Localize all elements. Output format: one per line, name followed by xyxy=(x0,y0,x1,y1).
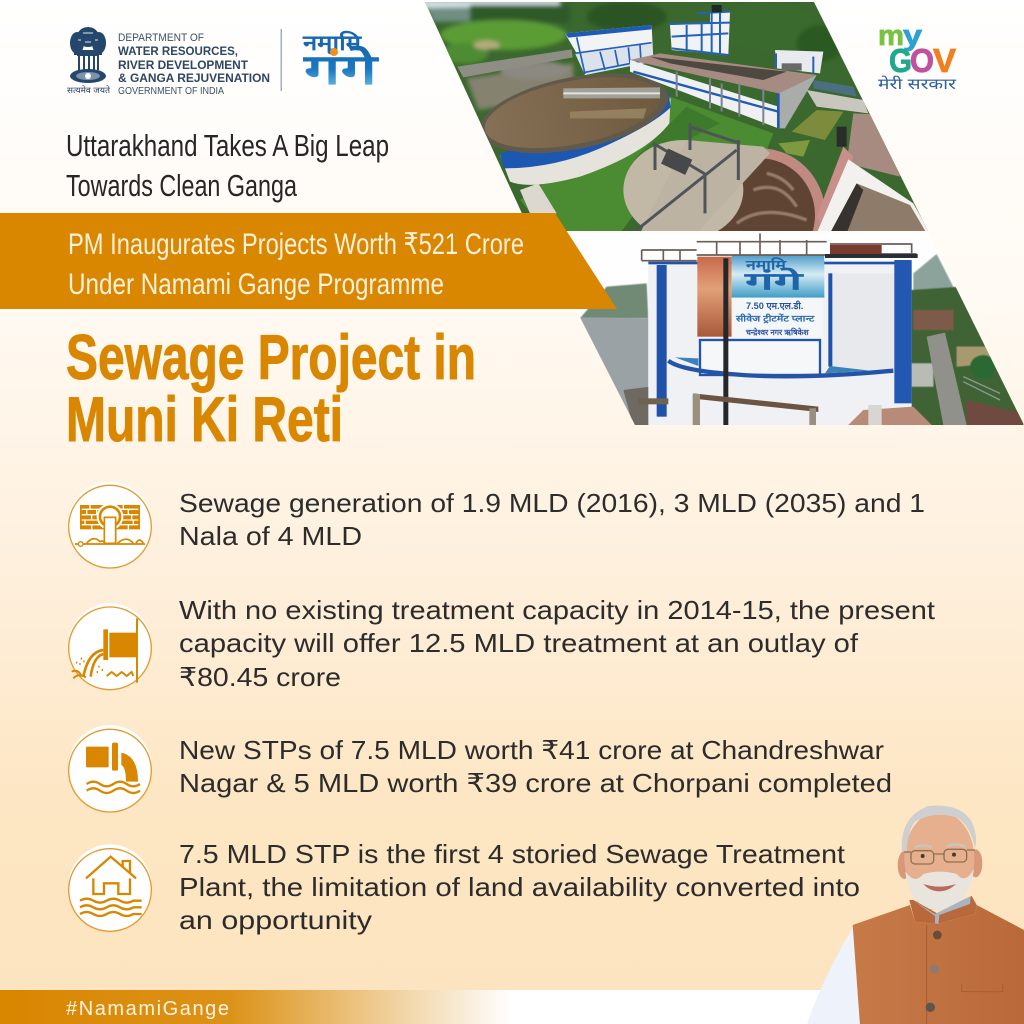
neck and face xyxy=(917,883,960,910)
text xyxy=(179,735,892,798)
text xyxy=(179,839,860,935)
photo: four storied STP building: चन्द्रेश्वर नगर ऋषिकेश xyxy=(745,327,809,337)
building body xyxy=(648,262,912,427)
icon: sewer outlet in brick wall xyxy=(68,482,152,568)
lift machinery xyxy=(848,406,932,425)
settling tank xyxy=(765,148,824,231)
item 1: sewage generation xyxy=(68,482,925,568)
main title: Muni Ki Reti xyxy=(66,385,343,455)
hashtag: #NamamiGange xyxy=(66,998,229,1020)
item 2: treatment capacity xyxy=(68,595,936,692)
text: an opportunity xyxy=(179,905,372,935)
department name: WATER RESOURCES, xyxy=(118,44,238,58)
photo: treatment plant aerial view xyxy=(425,2,928,231)
text: ₹80.45 crore xyxy=(179,662,341,692)
building one xyxy=(565,25,653,75)
banner text: Under Namami Gange Programme xyxy=(68,268,444,301)
vest xyxy=(853,905,1024,1024)
main title: Sewage Project in xyxy=(66,323,476,393)
photo: four storied STP building: गंगे xyxy=(743,267,805,295)
logo: MyGov xyxy=(878,20,957,93)
text: Plant, the limitation of land availability converted into xyxy=(179,872,860,902)
item 4: four storied plant xyxy=(68,839,860,935)
small corner building xyxy=(520,183,557,213)
concrete platform xyxy=(623,140,743,240)
large clarifier tank xyxy=(480,74,671,185)
text: Nagar & 5 MLD worth ₹39 crore at Chorpani completed xyxy=(179,768,892,798)
building two xyxy=(670,12,730,55)
logo: MyGov: y xyxy=(903,20,922,52)
text: 7.5 MLD STP is the first 4 storied Sewage Treatment xyxy=(179,839,846,869)
logo: Namami Gange: नमामि xyxy=(302,30,363,55)
shirt xyxy=(807,927,863,1024)
portrait of the Prime Minister xyxy=(807,806,1024,1024)
beard xyxy=(905,868,974,911)
logo: Namami Gange: गंगे xyxy=(302,45,379,93)
text: With no existing treatment capacity in 2014-15, the present xyxy=(179,595,936,625)
department name: DEPARTMENT OF xyxy=(118,32,204,44)
item 3: new STPs xyxy=(68,725,892,812)
photo: four storied STP building: नमामि xyxy=(745,256,787,272)
department name xyxy=(118,32,270,97)
text xyxy=(179,595,936,692)
logo: MyGov: m xyxy=(878,20,904,52)
icon: national emblem: सत्यमेव जयते xyxy=(67,85,110,95)
photo: four storied STP building: 7.50 एम.एल.डी. xyxy=(746,300,803,311)
text: Sewage generation of 1.9 MLD (2016), 3 MLD (2035) and 1 xyxy=(179,488,925,518)
icon: outfall into water xyxy=(68,603,152,690)
footer band xyxy=(0,990,1024,1024)
banner text: PM Inaugurates Projects Worth ₹521 Crore xyxy=(68,228,524,261)
glasses xyxy=(904,849,975,864)
text: New STPs of 7.5 MLD worth ₹41 crore at Chandreshwar xyxy=(179,735,884,765)
pipework xyxy=(693,393,818,412)
department name: RIVER DEVELOPMENT xyxy=(118,58,249,72)
icon: house above water xyxy=(68,844,152,931)
logo divider xyxy=(280,29,282,91)
intro heading xyxy=(66,128,389,203)
logo: MyGov: G xyxy=(889,42,912,79)
roof railings xyxy=(642,233,917,261)
photo: four storied STP building xyxy=(568,233,1024,425)
intro heading: Towards Clean Ganga xyxy=(66,168,298,203)
mural and sign xyxy=(697,257,732,337)
government department logo xyxy=(67,27,270,97)
department name: GOVERNMENT OF INDIA xyxy=(118,85,224,97)
logo: MyGov: मेरी सरकार xyxy=(878,75,957,93)
logo: Namami Gange xyxy=(302,30,379,93)
small rooftop building xyxy=(775,50,823,73)
main title xyxy=(66,323,476,455)
logo: MyGov: O xyxy=(910,42,934,79)
orange banner xyxy=(0,213,617,309)
icon: national emblem xyxy=(67,27,110,95)
text: Nala of 4 MLD xyxy=(179,521,362,551)
grass xyxy=(520,97,773,233)
icon: pipe discharging to water xyxy=(68,725,152,812)
logo: MyGov: V xyxy=(933,42,956,79)
department name: & GANGA REJUVENATION xyxy=(118,71,270,85)
hair xyxy=(902,806,976,852)
right side structures xyxy=(847,113,900,177)
text xyxy=(179,488,925,551)
text: capacity will offer 12.5 MLD treatment at an outlay of xyxy=(179,628,859,658)
banner text xyxy=(68,228,524,301)
intro heading: Uttarakhand Takes A Big Leap xyxy=(66,128,389,163)
long aeration block xyxy=(630,60,778,128)
photo: four storied STP building: सीवेज ट्रीटमेंट प्लान्ट xyxy=(735,314,815,325)
